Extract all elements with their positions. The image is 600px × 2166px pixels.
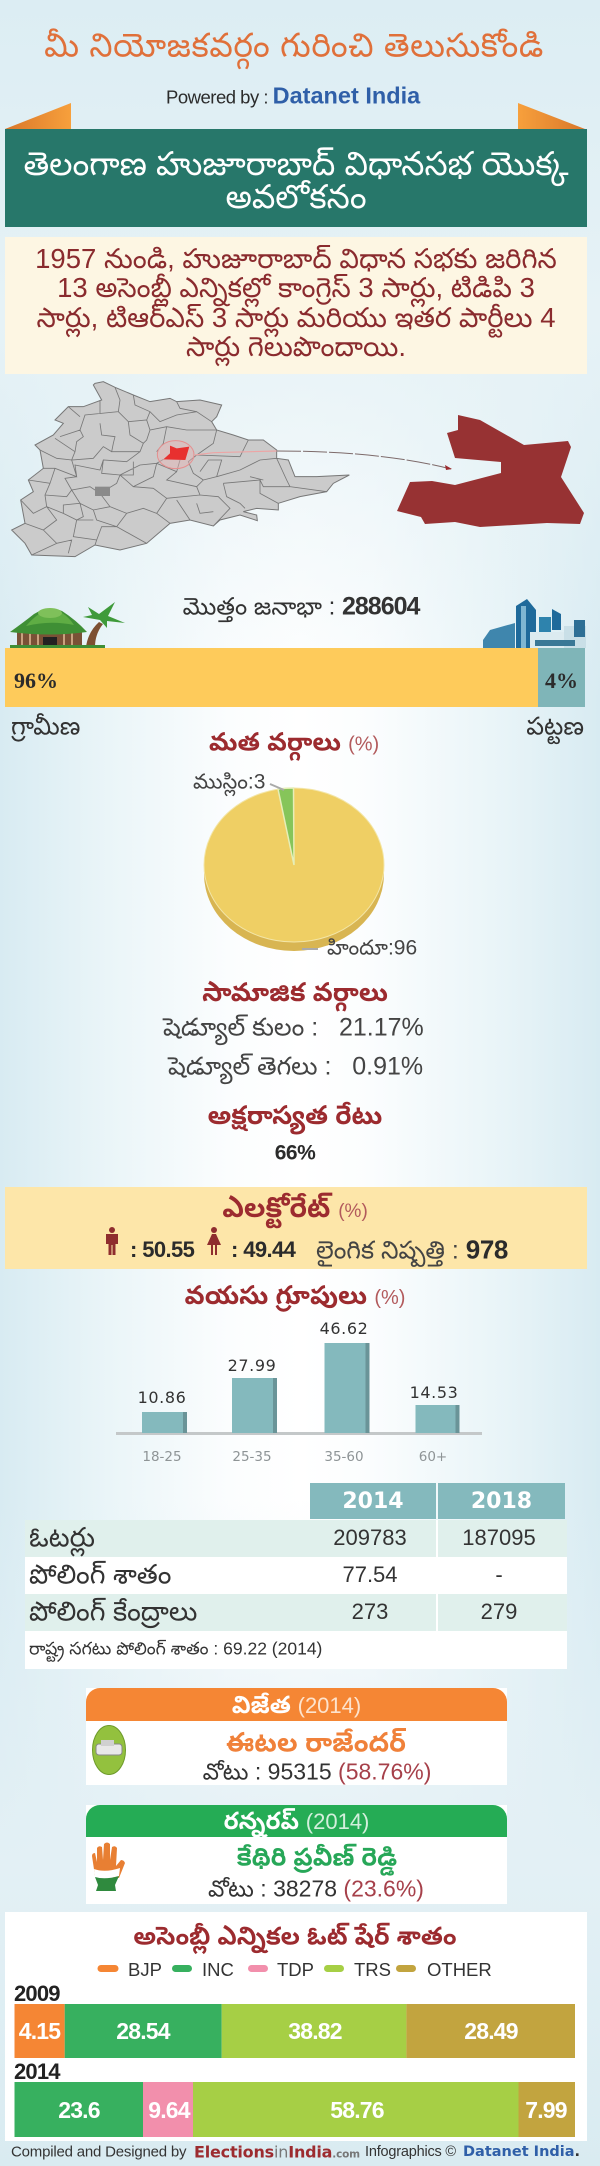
legend: INC [202, 1959, 234, 1980]
winner header [86, 1688, 507, 1721]
banner heading: తెలంగాణ హుజూరాబాద్ విధానసభ యొక్క [23, 145, 569, 182]
vote share panel [5, 1912, 587, 2141]
rural label: గ్రామీణ [11, 712, 80, 740]
rural share: 96% [14, 668, 58, 693]
icon: male [106, 1227, 118, 1255]
table: voters and polling: 77.54 [342, 1562, 398, 1587]
banner [5, 129, 587, 227]
2009 stacked bar: 28.54 [116, 2018, 171, 2044]
age groups heading: వయసు గ్రూపులు (%) [185, 1280, 405, 1310]
infographics credit: Infographics © [365, 2144, 456, 2160]
header 2018: 2018 [471, 1489, 532, 1514]
banner heading [23, 145, 569, 215]
electorate heading: ఎలక్టోరేట్ (%) [222, 1192, 368, 1223]
runner-up header: రన్నరప్ (2014) [224, 1808, 369, 1835]
intro text panel: సార్లు గెలుపొందాయి. [186, 331, 406, 362]
religion heading: మత వర్గాలు (%) [209, 728, 379, 756]
runner-up name: కేథిరి ప్రవీణ్ రెడ్డి [237, 1844, 397, 1872]
urban label: పట్టణ [526, 712, 584, 740]
banner heading: అవలోకనం [225, 178, 367, 215]
bar chart: age groups: 35-60 [324, 1449, 364, 1465]
ElectionsinIndia logo text: ElectionsinIndia.com [194, 2142, 360, 2162]
literacy value: 66% [275, 1142, 315, 1164]
2009 stacked bar [14, 2004, 575, 2058]
literacy heading: అక్షరాస్యత రేటు [208, 1100, 382, 1130]
row: polling percentage: పోలింగ్ శాతం [29, 1560, 172, 1590]
footer credits [11, 2142, 580, 2162]
bar chart: age groups [116, 1319, 482, 1465]
runner-up card [86, 1805, 507, 1904]
2014 stacked bar: 58.76 [330, 2097, 384, 2123]
scheduled tribe: షెడ్యూల్ తెగలు : 0.91% [168, 1052, 423, 1080]
2014 label: 2014 [14, 2059, 60, 2084]
pie label: hindu: హిందూ:96 [327, 936, 417, 960]
map: Telangana with highlighted constituency [10, 381, 350, 558]
table: voters and polling: 209783 [333, 1525, 407, 1550]
icon: TRS car symbol [92, 1725, 126, 1775]
bar chart: age groups: 10.86 [138, 1388, 186, 1407]
bar chart: age groups: 46.62 [320, 1319, 368, 1338]
intro text panel: 13 అసెంబ్లీ ఎన్నికల్లో కాంగ్రెస్ 3 సార్లు, టిడిపి 3 [57, 272, 535, 303]
icon: rural hut and palm [10, 602, 125, 648]
2014 stacked bar: 7.99 [525, 2097, 567, 2123]
winner name: ఈటల రాజేందర్ [226, 1728, 406, 1758]
row: state average: రాష్ట్ర సగటు పోలింగ్ శాతం : 69.22 (2014) [29, 1638, 322, 1658]
table: voters and polling: 273 [352, 1599, 388, 1624]
intro text panel: సార్లు, టిఆర్ఎస్ 3 సార్లు మరియు ఇతర పార్టీలు 4 [36, 302, 556, 333]
urban share: 4% [545, 668, 578, 693]
table: voters and polling: - [495, 1562, 503, 1587]
population total: మొత్తం జనాభా : 288604 [183, 592, 419, 620]
male share: : 50.55 [130, 1237, 194, 1262]
bar chart: age groups: 27.99 [228, 1356, 276, 1375]
winner votes: వోటు : 95315 (58.76%) [203, 1758, 431, 1784]
2014 stacked bar: 23.6 [58, 2097, 100, 2123]
pie label: muslim: ముస్లిం:3 [193, 770, 265, 794]
runner-up votes: వోటు : 38278 (23.6%) [208, 1876, 424, 1902]
pie chart: religion [204, 783, 384, 951]
sex ratio: లైంగిక నిష్పత్తి : 978 [316, 1234, 508, 1264]
vote share heading: అసెంబ్లీ ఎన్నికల ఓట్ షేర్ శాతం [133, 1922, 457, 1950]
legend: TRS [354, 1959, 391, 1980]
map detail: constituency shape [397, 415, 584, 527]
icon: female [207, 1227, 221, 1255]
Datanet India logo text: Datanet India. [463, 2144, 580, 2160]
runner-up header [86, 1805, 507, 1837]
rural urban bar [5, 648, 585, 707]
icon: urban buildings [483, 599, 586, 648]
row shading [25, 1520, 567, 1557]
2009 stacked bar: 4.15 [19, 2018, 61, 2044]
legend: TDP [277, 1959, 314, 1980]
legend: OTHER [427, 1959, 492, 1980]
2014 stacked bar: 9.64 [148, 2097, 191, 2123]
header 2014: 2014 [342, 1489, 404, 1514]
bar chart: age groups: 25-35 [232, 1449, 272, 1465]
female share: : 49.44 [231, 1237, 295, 1262]
winner header: విజేత (2014) [232, 1692, 361, 1719]
2009 stacked bar: 28.49 [464, 2018, 518, 2044]
rural share [5, 648, 538, 707]
2014 stacked bar [14, 2082, 575, 2137]
compiled by: Compiled and Designed by [11, 2144, 186, 2160]
bar chart: age groups: 18-25 [142, 1449, 182, 1465]
bar chart: age groups: 60+ [419, 1449, 447, 1465]
2009 stacked bar: 38.82 [288, 2018, 342, 2044]
legend: BJP [128, 1959, 162, 1980]
winner card [86, 1688, 507, 1785]
bar chart: age groups: 14.53 [410, 1383, 458, 1402]
electorate band [5, 1187, 587, 1269]
2009 label: 2009 [14, 1981, 60, 2006]
ribbon fold: left [5, 103, 585, 129]
header 2018 [438, 1483, 565, 1519]
row: voters: ఓటర్లు [29, 1522, 95, 1552]
intro text panel: 1957 నుండి, హుజూరాబాద్ విధాన సభకు జరిగిన [35, 243, 557, 274]
scheduled caste: షెడ్యూల్ కులం : 21.17% [163, 1014, 424, 1042]
table: voters and polling: 187095 [462, 1525, 536, 1550]
icon: congress hand [92, 1842, 125, 1891]
urban share [538, 648, 585, 707]
legend [98, 1959, 492, 1980]
table: voters and polling: 279 [481, 1599, 517, 1624]
map arrow [277, 450, 452, 470]
row: polling stations: పోలింగ్ కేంద్రాలు [29, 1596, 197, 1626]
powered by credit: Powered by : Datanet India [166, 82, 420, 108]
social groups heading: సామాజిక వర్గాలు [202, 977, 388, 1007]
title: మీ నియోజకవర్గం గురించి తెలుసుకోండి [44, 26, 544, 64]
table: voters and polling [25, 1483, 567, 1669]
header 2014 [310, 1483, 436, 1519]
intro text panel [5, 237, 587, 374]
